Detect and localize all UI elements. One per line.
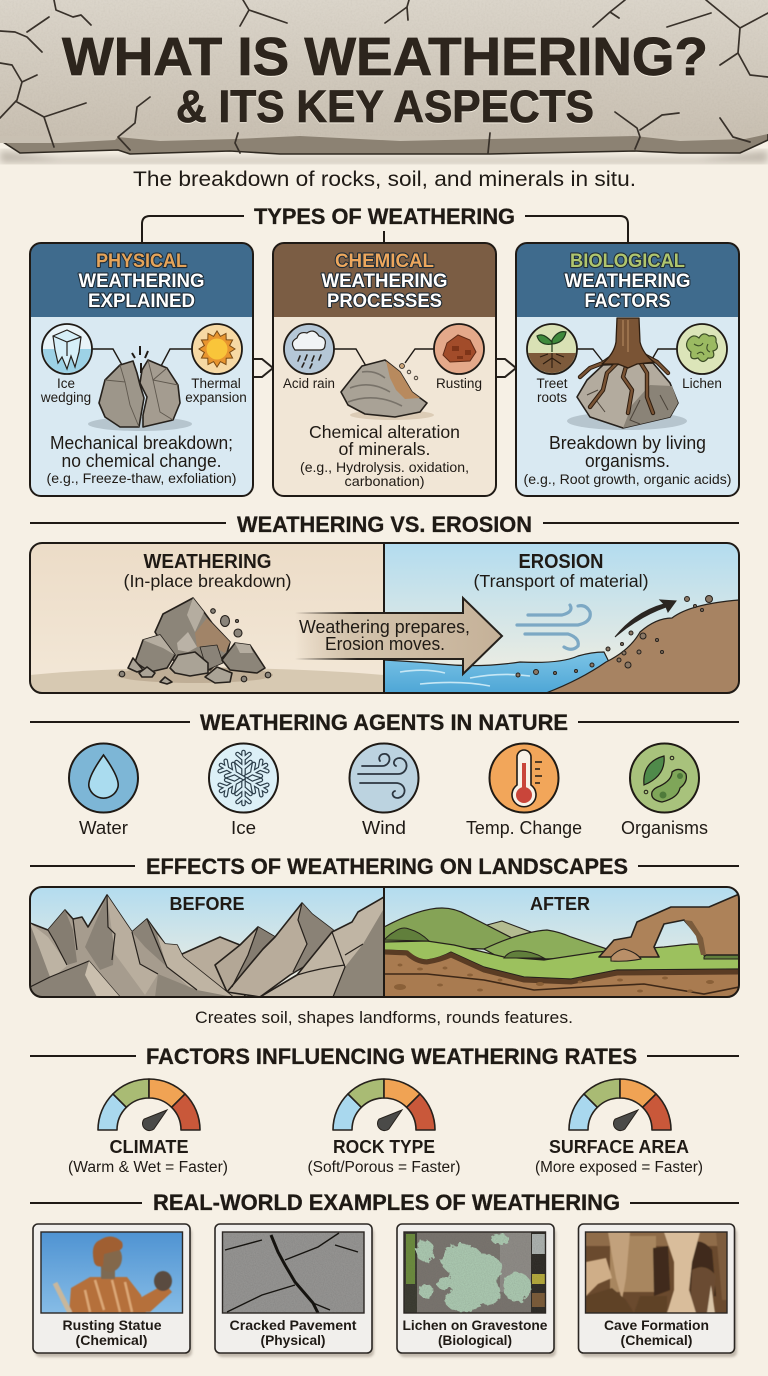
agent: water — [69, 744, 138, 838]
panel frame — [30, 887, 739, 997]
right label: EROSION — [518, 551, 604, 573]
eroding hillside — [546, 600, 739, 693]
panel heading: PROCESSES — [327, 291, 442, 312]
divider — [383, 887, 385, 997]
panel frame — [30, 543, 739, 693]
gauge: surface area — [535, 1079, 703, 1176]
arrow: weathering prepares, erosion moves: Erosion moves. — [325, 634, 445, 654]
panel text: organisms. — [585, 450, 670, 471]
icon labels: Rusting — [436, 376, 482, 391]
agent: temperature change: Temp. Change — [466, 818, 582, 838]
panel heading — [78, 251, 204, 312]
left label — [124, 551, 292, 591]
section heading: factors influencing rates: FACTORS INFLUENCING WEATHERING RATES — [146, 1044, 637, 1069]
icon: lichen — [677, 324, 727, 374]
panel text: (e.g., Root growth, organic acids) — [524, 471, 732, 487]
panel text: Mechanical breakdown; — [50, 432, 233, 453]
illustration: altered rock — [341, 360, 434, 420]
panel heading — [564, 251, 690, 312]
icon: thermal expansion sun — [192, 324, 242, 374]
arrow: weathering prepares, erosion moves — [295, 598, 502, 674]
connector lines — [92, 349, 192, 368]
card label — [402, 1317, 548, 1348]
panel heading: FACTORS — [584, 291, 670, 312]
connector lines — [577, 349, 678, 363]
panel heading: WEATHERING — [78, 271, 204, 292]
card: cave formation — [578, 1224, 737, 1357]
gauge: rock type: ROCK TYPE — [333, 1137, 435, 1157]
subtitle: The breakdown of rocks, soil, and minerals in situ. — [133, 168, 636, 191]
arrow: physical to chemical — [253, 359, 273, 377]
agent: ice: Ice — [231, 818, 256, 838]
panel text: (e.g., Freeze-thaw, exfoliation) — [46, 470, 236, 486]
connector lines — [334, 349, 435, 366]
icon labels: Thermal — [191, 376, 241, 391]
panel heading: BIOLOGICAL — [570, 251, 685, 272]
panel: chemical weathering — [273, 243, 496, 496]
arrow: weathering prepares, erosion moves: Weathering prepares, — [299, 617, 470, 637]
before: jagged mountains — [30, 887, 385, 997]
gauge: rock type — [308, 1079, 460, 1176]
panel heading: WEATHERING — [322, 271, 448, 292]
panel heading: PHYSICAL — [96, 251, 187, 272]
card label: (Biological) — [438, 1332, 512, 1348]
card label: Cave Formation — [604, 1317, 709, 1333]
natural rock arch — [599, 893, 741, 957]
panel: biological weathering — [516, 243, 739, 496]
panel heading: WEATHERING — [564, 271, 690, 292]
card label: Rusting Statue — [62, 1317, 162, 1333]
card label: Lichen on Gravestone — [402, 1317, 548, 1333]
after: rounded hills, soil and arch — [384, 887, 741, 997]
panel heading: EXPLAINED — [88, 291, 195, 312]
header: cracked stone banner — [0, 0, 768, 163]
right side: erosion background — [384, 543, 739, 693]
left label: WEATHERING — [144, 551, 272, 573]
gauge: climate — [68, 1079, 228, 1176]
title — [62, 27, 708, 132]
icon labels: Acid rain — [283, 376, 335, 391]
icon labels: wedging — [40, 390, 91, 405]
icon labels — [536, 376, 722, 405]
panel text — [300, 422, 469, 489]
icon labels: Treet — [536, 376, 568, 391]
panel text: (e.g., Hydrolysis. oxidation, — [300, 459, 469, 475]
icon labels: Ice — [57, 376, 75, 391]
agent: ice — [209, 744, 278, 838]
card: rusting statue — [33, 1224, 192, 1357]
illustration: tree roots splitting a rock — [567, 318, 687, 430]
panel: before and after landscapes — [30, 887, 741, 997]
icon: wind gusts — [517, 605, 590, 649]
pebbles on hillside — [516, 596, 712, 677]
card label: (Physical) — [260, 1332, 326, 1348]
caption: Creates soil, shapes landforms, rounds features. — [195, 1009, 573, 1027]
panel text — [524, 432, 732, 487]
agent: wind — [350, 744, 418, 838]
illustration: split rock — [88, 346, 192, 431]
icon: tree roots — [527, 324, 577, 375]
right label: (Transport of material) — [474, 571, 648, 591]
agent: organisms — [621, 744, 708, 838]
title: & ITS KEY ASPECTS — [176, 81, 594, 132]
photo: cracked asphalt — [222, 1232, 364, 1313]
curved motion arrow — [615, 600, 676, 637]
agent: water: Water — [79, 818, 128, 838]
panel text — [46, 432, 236, 486]
panel text: of minerals. — [338, 439, 430, 459]
agent: temperature change — [466, 744, 582, 838]
divider — [383, 543, 385, 693]
section heading: types of weathering: TYPES OF WEATHERING — [254, 204, 515, 229]
before label: BEFORE — [170, 894, 244, 914]
gauge: surface area: SURFACE AREA — [549, 1137, 689, 1157]
photo: lichen on stone — [404, 1232, 546, 1313]
section heading: weathering vs erosion: WEATHERING VS. EROSION — [237, 512, 532, 537]
left label: (In-place breakdown) — [124, 571, 292, 591]
rock pile illustration — [117, 598, 273, 684]
panel heading — [322, 251, 448, 312]
icon labels: roots — [537, 390, 567, 405]
title: WHAT IS WEATHERING? — [62, 27, 708, 87]
card label — [604, 1317, 709, 1348]
icon: ice wedging — [42, 324, 92, 375]
left side: weathering background — [30, 543, 384, 693]
card: lichen on gravestone — [397, 1224, 556, 1357]
panel text: Chemical alteration — [309, 422, 460, 442]
gauge: surface area: (More exposed = Faster) — [535, 1159, 703, 1176]
section heading: types of weathering — [142, 204, 628, 243]
photo: statue against sky — [41, 1232, 182, 1313]
card label — [62, 1317, 162, 1348]
card label: (Chemical) — [76, 1332, 148, 1348]
agent: organisms: Organisms — [621, 818, 708, 838]
right label — [474, 551, 648, 591]
cracks in the stone — [0, 0, 768, 153]
panel text: Breakdown by living — [549, 432, 706, 453]
after label: AFTER — [530, 894, 590, 914]
card label: (Chemical) — [620, 1332, 692, 1348]
section heading: weathering agents: WEATHERING AGENTS IN NATURE — [200, 710, 568, 735]
icon: acid rain — [284, 324, 334, 374]
icon labels — [283, 376, 482, 391]
panel heading: CHEMICAL — [335, 251, 434, 272]
icon: rusting — [434, 324, 484, 374]
panel text: carbonation) — [344, 473, 424, 489]
arrow: chemical to biological — [496, 359, 516, 377]
icon labels — [40, 376, 247, 405]
gauge: climate: (Warm & Wet = Faster) — [68, 1159, 228, 1176]
section heading: effects on landscapes: EFFECTS OF WEATHERING ON LANDSCAPES — [146, 854, 628, 879]
gauge: rock type: (Soft/Porous = Faster) — [308, 1159, 460, 1176]
panel: physical weathering — [30, 243, 253, 496]
gauge: climate: CLIMATE — [110, 1137, 188, 1157]
card label: Cracked Pavement — [230, 1317, 357, 1333]
card label — [230, 1317, 357, 1348]
panel: weathering vs erosion comparison — [30, 543, 739, 693]
card: cracked pavement — [215, 1224, 374, 1357]
section heading: real-world examples: REAL-WORLD EXAMPLES OF WEATHERING — [153, 1190, 620, 1215]
icon labels: Lichen — [682, 376, 722, 391]
photo: cave with stalactites — [585, 1232, 727, 1313]
icon labels: expansion — [185, 390, 247, 405]
panel text: no chemical change. — [62, 450, 222, 471]
agent: wind: Wind — [362, 818, 406, 838]
